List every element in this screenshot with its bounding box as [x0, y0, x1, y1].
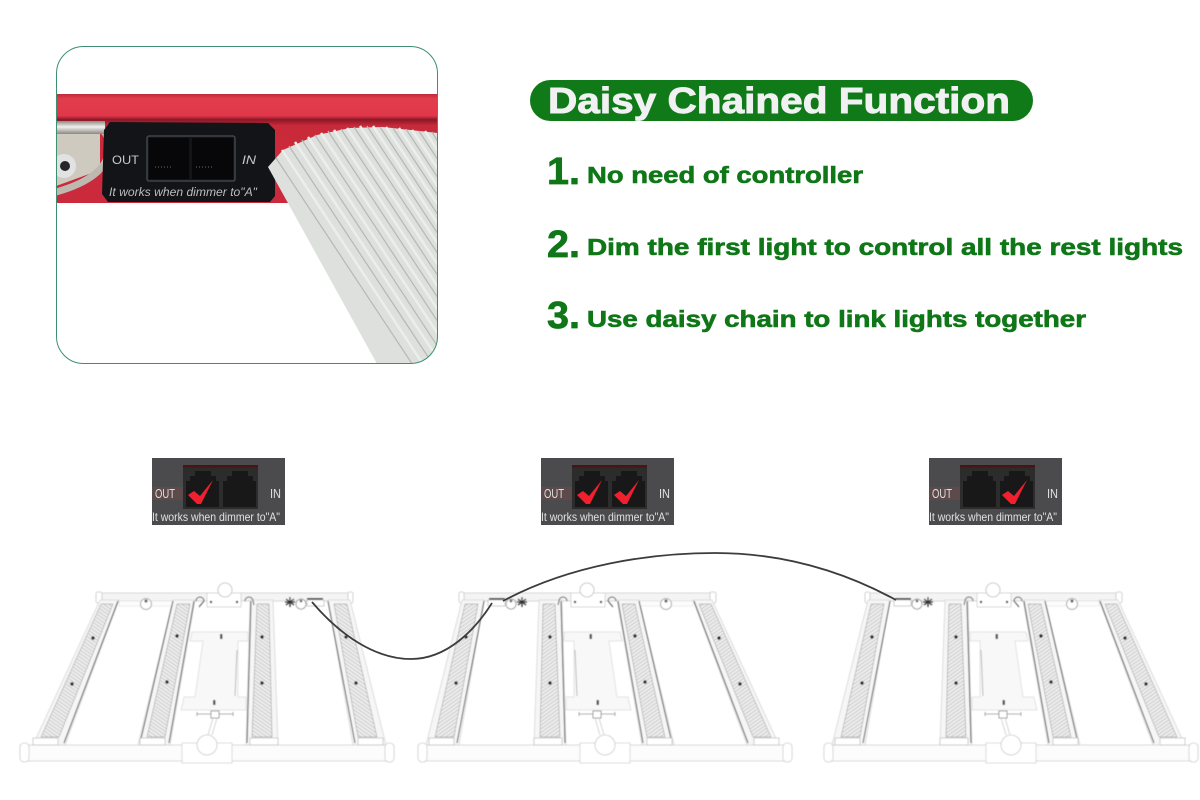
red housing bar [56, 94, 438, 203]
list item 3: Use daisy chain to link lights together [587, 306, 1086, 332]
light fixture 1 [20, 583, 394, 763]
black port label: It works when dimmer to"A" [109, 187, 258, 199]
list item 2: 2. [547, 224, 580, 266]
heading pill: Daisy Chained Function [548, 80, 1010, 121]
cable: light 2 to light 3 [503, 553, 896, 601]
list item 2: Dim the first light to control all the rest lights [587, 234, 1183, 260]
light fixture 2 [418, 583, 792, 763]
panel: connector close-up photo [56, 46, 438, 364]
ribbed heat sink [268, 125, 437, 363]
light fixture 3 [824, 583, 1198, 763]
list item 3: 3. [547, 295, 580, 337]
list item 2 [547, 224, 1183, 266]
metal D-ring [57, 121, 106, 196]
port thumbnail: first light, OUT checked: OUT [155, 486, 175, 501]
cable: light 1 to light 2 [312, 602, 492, 659]
list item 1 [547, 151, 863, 193]
port thumbnail: first light, OUT checked [152, 458, 285, 525]
list item 1: 1. [547, 151, 580, 193]
port thumbnail: last light, IN checked [929, 458, 1062, 525]
list item 3 [547, 295, 1086, 337]
port thumbnail: last light, IN checked: IN [1047, 486, 1058, 501]
port thumbnail: first light, OUT checked: IN [270, 486, 281, 501]
port thumbnail: last light, IN checked: OUT [932, 486, 952, 501]
port thumbnail: last light, IN checked: It works when dimmer to"A" [929, 510, 1057, 524]
port thumbnail: middle light, both checked: It works when dimmer to"A" [541, 510, 669, 524]
port thumbnail: middle light, both checked: IN [659, 486, 670, 501]
black port label: OUT [112, 153, 140, 167]
black port label: IN [242, 153, 256, 167]
port thumbnail: middle light, both checked: OUT [544, 486, 564, 501]
list item 1: No need of controller [587, 162, 863, 188]
port thumbnail: first light, OUT checked: It works when dimmer to"A" [152, 510, 280, 524]
port thumbnail: middle light, both checked [541, 458, 674, 525]
black port label [102, 122, 275, 202]
